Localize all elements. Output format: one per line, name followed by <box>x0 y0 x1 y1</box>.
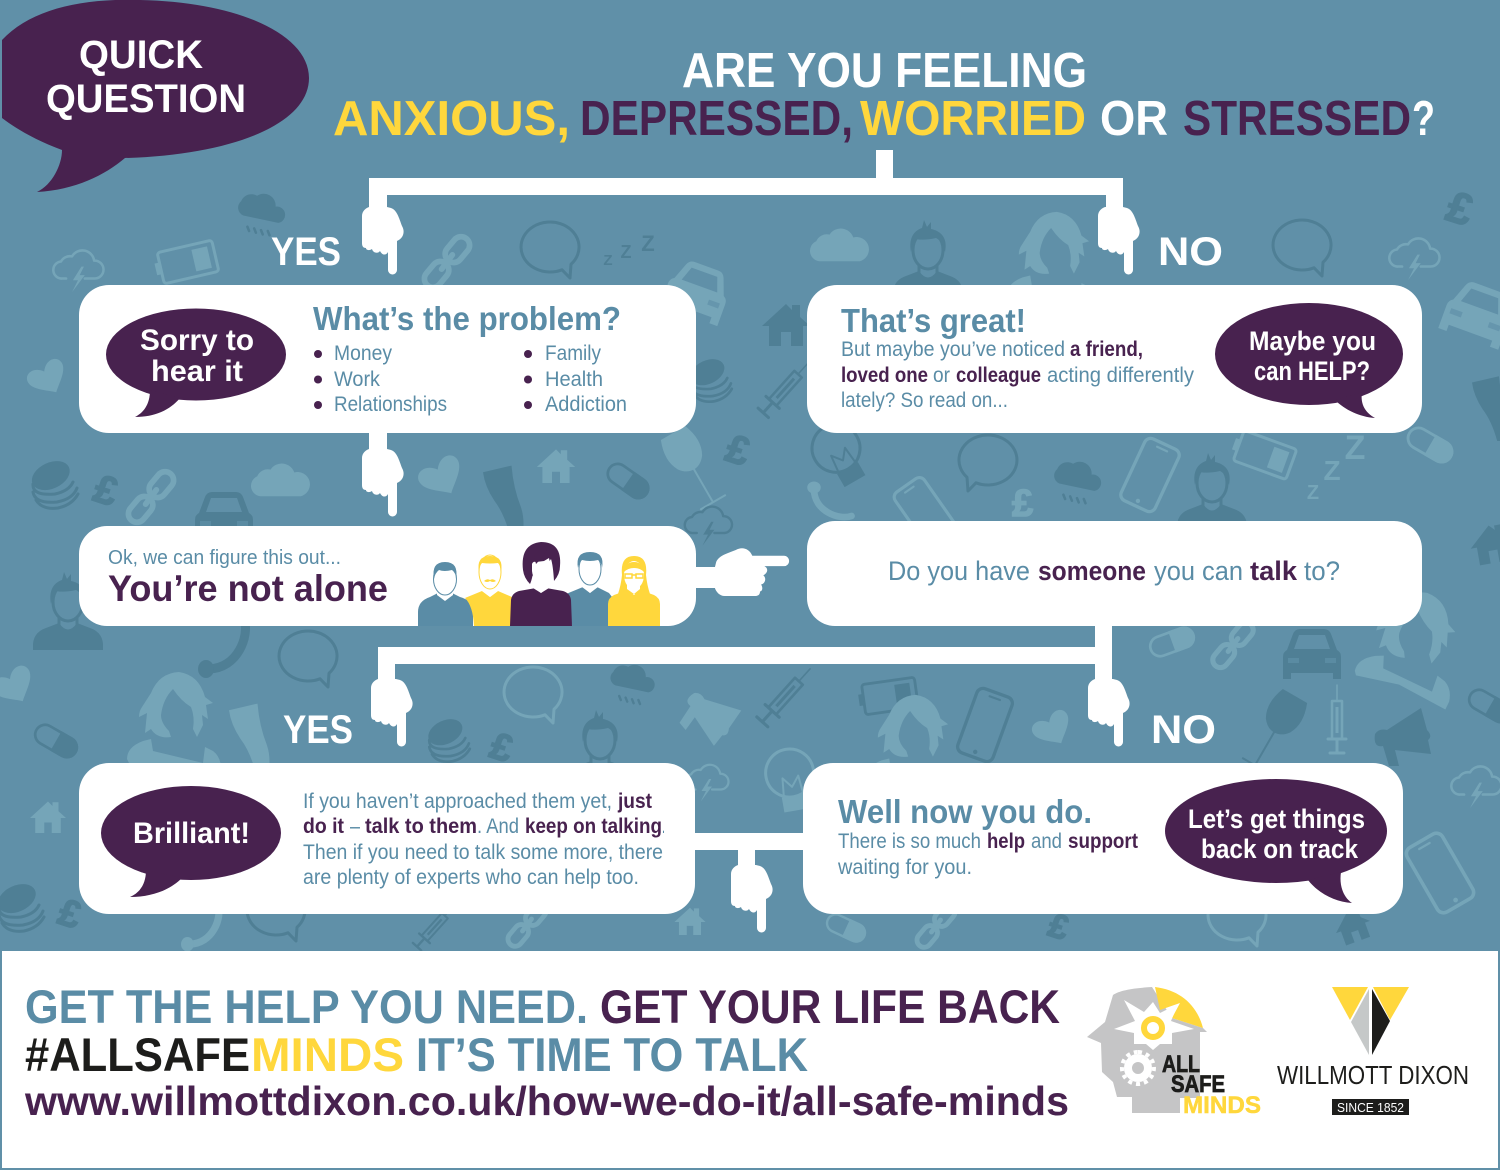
arrow: hand pointing right to someone to talk to <box>715 548 789 596</box>
heading: what's the problem: What’s the problem? <box>313 300 621 337</box>
speech bubble: let's get things back on track: back on track <box>1201 834 1359 864</box>
panel: that's great <box>807 285 1422 433</box>
panel: do you have someone to talk to: Do you have <box>888 556 1030 586</box>
background icon pattern: £ <box>53 891 86 938</box>
body text: just do it: If you haven’t approached them yet, <box>303 790 612 813</box>
illustration: group of five people <box>418 542 660 626</box>
title: STRESSED <box>1183 92 1411 146</box>
body text: noticed a friend <box>841 338 1194 412</box>
panel: do you have someone to talk to <box>807 521 1422 626</box>
background icon pattern: £ <box>1440 182 1479 236</box>
body text: help and support: help <box>987 830 1025 853</box>
body text: noticed a friend: But maybe you’ve noticed <box>841 338 1065 361</box>
background icon pattern: £ <box>1012 483 1033 525</box>
connector: title to yes and no <box>369 150 1123 210</box>
logo: willmott dixon: WILLMOTT DIXON <box>1277 1060 1469 1090</box>
background icon pattern: Z <box>1345 429 1365 467</box>
background icon pattern: Z <box>1323 455 1341 486</box>
panel: brilliant <box>79 763 695 914</box>
list of problems: Work <box>334 368 380 391</box>
heading: that's great: That’s great! <box>841 302 1026 339</box>
speech bubble: quick question: QUESTION <box>46 77 246 121</box>
arrow: hand pointing to second no <box>1088 679 1130 746</box>
body text: noticed a friend: colleague <box>956 364 1041 387</box>
speech bubble: quick question: QUICK <box>79 33 203 77</box>
speech bubble: sorry to hear it: hear it <box>151 355 243 388</box>
panel: you're not alone <box>79 526 696 626</box>
speech bubble: sorry to hear it <box>106 308 286 417</box>
body text: just do it: just <box>617 790 652 813</box>
body text: help and support: and <box>1031 830 1062 853</box>
title: DEPRESSED, <box>580 92 853 146</box>
title: ? <box>1412 92 1435 146</box>
background icon pattern: £ <box>1044 906 1073 948</box>
panel: do you have someone to talk to: you can <box>1154 556 1243 586</box>
panel: well now you do <box>803 763 1403 914</box>
body text: just do it: Then if you need to talk some more, there <box>303 841 663 864</box>
body text: just do it <box>303 790 665 889</box>
body text: just do it: – <box>350 815 360 838</box>
logo: willmott dixon <box>1277 987 1469 1115</box>
panel: do you have someone to talk to: to? <box>1304 556 1340 586</box>
connector: talk panel to not alone <box>694 567 718 588</box>
body text: help and support <box>837 830 1138 879</box>
body text: just do it: . <box>662 815 665 838</box>
title: OR <box>1100 92 1168 146</box>
speech bubble: maybe you can help <box>1215 303 1403 418</box>
list of problems: Money <box>334 342 392 365</box>
body text: help and support: There is so much <box>838 830 981 853</box>
logo: all safe minds: ALL <box>1162 1051 1200 1078</box>
heading: well now you do: Well now you do. <box>838 793 1092 830</box>
connector: problem panel to not alone panel <box>369 430 387 454</box>
body text: noticed a friend: a friend, <box>1070 338 1143 361</box>
arrow: hand pointing to second yes <box>371 679 413 746</box>
label: yes: YES <box>271 230 341 274</box>
speech bubble: sorry to hear it: Sorry to <box>140 324 254 357</box>
list of problems: Relationships <box>334 393 447 416</box>
footer band <box>2 951 1498 1168</box>
speech bubble: maybe you can help: Maybe you <box>1249 326 1376 356</box>
body text: just do it: . And <box>477 815 519 838</box>
body text: noticed a friend: loved one <box>841 364 928 387</box>
label: second yes: YES <box>283 708 353 752</box>
speech bubble: brilliant <box>101 786 281 897</box>
body text: just do it: are plenty of experts who can help too. <box>303 866 639 889</box>
footer headline: #ALLSAFE <box>25 1028 250 1081</box>
arrow: hand pointing to first no <box>1098 207 1140 274</box>
text: ok we can figure this out: Ok, we can figure this out... <box>108 547 341 569</box>
logo: all safe minds <box>1087 987 1261 1119</box>
footer headline: IT’S TIME TO TALK <box>416 1028 808 1081</box>
label: no: NO <box>1158 230 1223 274</box>
body text: noticed a friend: lately? So read on... <box>841 389 1008 412</box>
body text: help and support: waiting for you. <box>837 856 972 879</box>
title: WORRIED <box>860 92 1086 146</box>
list of problems: Addiction <box>545 393 627 416</box>
body text: noticed a friend: acting differently <box>1047 364 1194 387</box>
body text: help and support: support <box>1068 830 1138 853</box>
list of problems: Family <box>545 342 601 365</box>
panel: what's the problem <box>79 285 696 433</box>
footer headline: GET THE HELP YOU NEED. <box>25 980 588 1033</box>
panel: do you have someone to talk to: someone <box>1038 556 1146 586</box>
footer url: www.willmottdixon.co.uk/how-we-do-it/all-safe-minds <box>24 1078 1069 1124</box>
background icon pattern: Z <box>641 231 655 256</box>
footer headline <box>25 980 1060 1081</box>
background icon pattern: Z <box>1307 482 1319 504</box>
connector: bottom panels <box>693 833 805 870</box>
title: ARE YOU FEELING <box>682 44 1087 98</box>
arrow: hand pointing to you're not alone <box>362 449 404 516</box>
body text: just do it: talk to them <box>365 815 477 838</box>
title <box>333 44 1435 146</box>
body text: just do it: keep on talking <box>525 815 662 838</box>
list of problems <box>314 342 627 416</box>
speech bubble: maybe you can help: can HELP? <box>1254 356 1370 386</box>
background icon pattern: Z <box>603 252 613 269</box>
label: second no: NO <box>1151 708 1216 752</box>
footer headline: GET YOUR LIFE BACK <box>600 980 1060 1033</box>
logo: all safe minds: MINDS <box>1183 1092 1261 1119</box>
background icon pattern: £ <box>485 725 518 771</box>
arrow: hand pointing to first yes <box>362 207 404 274</box>
background icon pattern <box>0 182 1500 953</box>
logo: all safe minds: SAFE <box>1171 1071 1225 1098</box>
background icon pattern: Z <box>620 242 632 262</box>
arrow: hand pointing to footer <box>731 865 773 932</box>
heading: you're not alone: You’re not alone <box>108 568 388 609</box>
list of problems: Health <box>545 368 603 391</box>
background icon pattern: £ <box>720 426 755 475</box>
speech bubble: let's get things back on track: Let’s get things <box>1188 804 1365 834</box>
panel: do you have someone to talk to: talk <box>1250 556 1298 586</box>
title: ANXIOUS, <box>333 92 570 146</box>
speech bubble: brilliant: Brilliant! <box>133 817 250 850</box>
connector: talk panel to second yes and no <box>378 624 1112 682</box>
logo: willmott dixon: SINCE 1852 <box>1337 1100 1404 1115</box>
background icon pattern: £ <box>88 467 123 515</box>
footer headline: MINDS <box>251 1028 404 1081</box>
body text: just do it: do it <box>303 815 344 838</box>
body text: noticed a friend: or <box>933 364 950 387</box>
speech bubble: quick question <box>2 0 309 192</box>
speech bubble: let's get things back on track <box>1165 779 1387 903</box>
